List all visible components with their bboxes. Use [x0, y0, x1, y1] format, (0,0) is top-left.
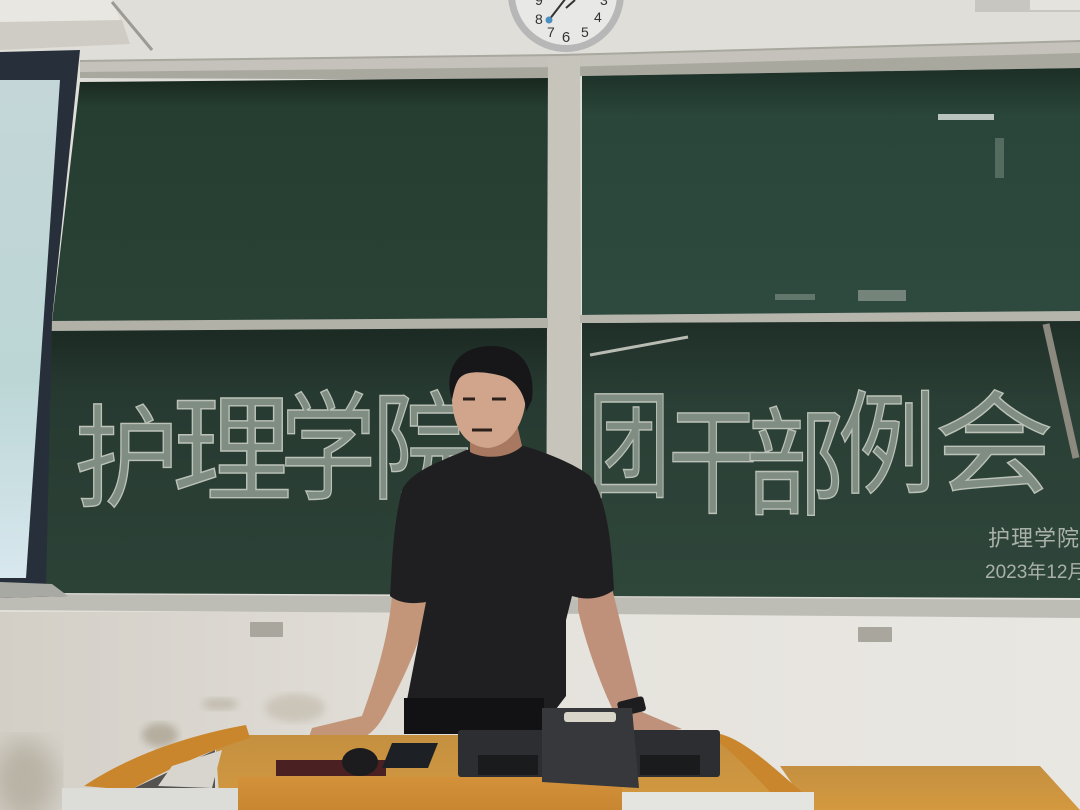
clock: 7 [547, 24, 555, 40]
right arm [578, 588, 682, 734]
chalk title, left [74, 384, 472, 522]
clock: 6 [562, 29, 570, 46]
sweater [390, 446, 614, 730]
chalk title, left: 学 [280, 384, 376, 516]
chalk title, right: 部 [745, 400, 845, 532]
trousers [404, 698, 544, 734]
chalk title, right: 例 [838, 383, 936, 508]
upper left chalkboard panel [52, 78, 548, 322]
clock [508, 0, 624, 52]
clock: 4 [594, 9, 602, 25]
board dividers [48, 56, 1080, 600]
lectern desk [62, 725, 1080, 810]
chalk signature and date: 护理学院 [988, 526, 1080, 551]
chalk title, right [588, 382, 1054, 532]
lower wall with stains [0, 612, 1080, 810]
top-left ceiling fixture [0, 0, 152, 50]
chalk title, right: 干 [668, 398, 758, 530]
items on lectern: papers, mouse, phone [158, 743, 438, 788]
projector screen [0, 50, 80, 598]
watch [617, 696, 647, 717]
speaker [308, 346, 682, 741]
clock: 5 [581, 24, 589, 40]
neck [470, 420, 522, 457]
clock: 8 [535, 11, 543, 27]
lower right chalkboard panel [582, 320, 1080, 598]
top-right fixture [975, 0, 1080, 12]
upper right chalkboard panel [582, 68, 1080, 315]
chalk title, right: 会 [934, 383, 1054, 508]
eyes and mouth [463, 399, 506, 430]
left arm [308, 596, 428, 741]
chalk signature and date [985, 526, 1080, 583]
face [452, 366, 526, 448]
chalk title, left: 理 [172, 386, 292, 518]
chalk title, left: 护 [74, 397, 179, 522]
board frame [0, 40, 1080, 618]
hair [449, 346, 533, 412]
chalk title, right: 团 [588, 382, 670, 514]
lectern equipment [458, 708, 720, 788]
chalk title, left: 院 [372, 384, 472, 516]
lower left chalkboard panel [44, 327, 547, 595]
